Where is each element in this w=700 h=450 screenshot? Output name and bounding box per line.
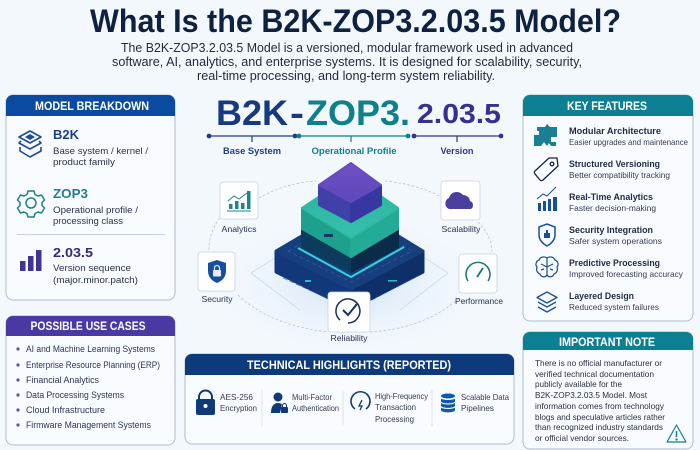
note text: B2K-ZOP3.2.03.5 Model. Most bbox=[535, 390, 648, 400]
icon: speed gauge bbox=[351, 392, 370, 410]
note text bbox=[535, 358, 665, 443]
highlight: authentication: Multi-Factor bbox=[292, 392, 332, 402]
feature: modular architecture: Modular Architecture bbox=[569, 126, 661, 137]
upper layer: teal bbox=[302, 175, 398, 257]
highlight: data pipelines: Pipelines bbox=[461, 403, 494, 413]
icon: stacked layers bbox=[19, 131, 41, 157]
feature: predictive processing bbox=[536, 257, 684, 279]
card: performance: Performance bbox=[455, 296, 503, 306]
intro text: software, AI, analytics, and enterprise systems. It is designed for scalability, security, bbox=[112, 54, 582, 69]
highlight: data pipelines bbox=[441, 392, 509, 413]
use case list: Firmware Management Systems bbox=[26, 420, 151, 430]
icon: warning triangle bbox=[667, 425, 686, 442]
feature: predictive processing: Improved forecasting accuracy bbox=[569, 269, 684, 279]
highlight: encryption bbox=[196, 391, 257, 415]
card: performance bbox=[455, 254, 503, 306]
B2K entry: Base system / kernel / bbox=[53, 146, 148, 157]
header: key features bbox=[523, 95, 693, 116]
note text: publicly available for the bbox=[535, 379, 622, 389]
version entry bbox=[53, 245, 138, 286]
ZOP3 entry bbox=[53, 186, 138, 227]
version entry: Version sequence bbox=[53, 263, 131, 274]
icon: shield lock bbox=[208, 260, 226, 283]
card: reliability: Reliability bbox=[330, 333, 368, 343]
feature: predictive processing: Predictive Processing bbox=[569, 258, 660, 269]
intro text: real-time processing, and long-term system reliability. bbox=[197, 68, 495, 83]
highlight: transaction processing: Processing bbox=[375, 414, 414, 424]
card: security: Security bbox=[202, 294, 233, 304]
feature: layered design bbox=[537, 291, 659, 312]
icon: database bbox=[441, 394, 455, 412]
feature: structured versioning: Better compatibility tracking bbox=[569, 170, 670, 180]
model name wordmark: - bbox=[290, 94, 304, 133]
ZOP3 entry: ZOP3 bbox=[53, 186, 88, 201]
icon: check circle bbox=[336, 299, 360, 323]
feature: security integration: Safer system operations bbox=[569, 236, 662, 246]
highlight: transaction processing: Transaction bbox=[375, 402, 416, 412]
top cube: purple bbox=[319, 163, 381, 222]
icon: brain bbox=[536, 257, 558, 277]
header: possible use cases bbox=[6, 316, 175, 336]
B2K entry bbox=[53, 127, 148, 168]
feature: layered design: Reduced system failures bbox=[569, 302, 659, 312]
icon: analytics chart bbox=[227, 191, 251, 211]
highlight: data pipelines: Scalable Data bbox=[461, 392, 509, 402]
header: model breakdown bbox=[6, 95, 175, 116]
card: scalability bbox=[441, 181, 481, 234]
icon: rising bars bbox=[537, 187, 557, 211]
feature: real-time analytics bbox=[537, 187, 656, 213]
note text: than recognized industry standards bbox=[535, 422, 663, 432]
intro text bbox=[112, 40, 582, 83]
feature: layered design: Layered Design bbox=[569, 291, 634, 302]
card: security bbox=[198, 252, 235, 304]
note text: information comes from technology bbox=[535, 401, 665, 411]
B2K entry: B2K bbox=[53, 127, 80, 142]
feature: modular architecture bbox=[534, 124, 688, 147]
model name wordmark: 2.03.5 bbox=[417, 98, 501, 129]
header: possible use cases: POSSIBLE USE CASES bbox=[30, 321, 146, 333]
dashed orbit around stack bbox=[209, 181, 492, 332]
icon: shield bbox=[539, 224, 555, 246]
card: analytics bbox=[220, 182, 258, 234]
segment bracket: base system: Base System bbox=[223, 146, 281, 157]
feature: real-time analytics: Real-Time Analytics bbox=[569, 192, 653, 203]
version entry: 2.03.5 bbox=[53, 245, 93, 260]
middle layer: dark bbox=[301, 228, 399, 273]
model name wordmark: ZOP3. bbox=[306, 94, 410, 133]
segment bracket: operational profile: Operational Profile bbox=[312, 146, 396, 157]
icon: gauge bbox=[466, 262, 490, 281]
note text: verified technical documentation bbox=[535, 369, 654, 379]
header: technical highlights bbox=[185, 354, 514, 375]
panel: key features bbox=[523, 95, 693, 321]
icon: version bars bbox=[20, 250, 42, 271]
ZOP3 entry: Operational profile / bbox=[53, 205, 138, 216]
use case list: Financial Analytics bbox=[26, 375, 99, 385]
feature: structured versioning bbox=[534, 158, 670, 181]
intro text: The B2K-ZOP3.2.03.5 Model is a versioned, modular framework used in advanced bbox=[121, 40, 573, 55]
use case list bbox=[16, 344, 160, 430]
card: scalability: Scalability bbox=[442, 224, 481, 234]
header: key features: KEY FEATURES bbox=[567, 101, 647, 113]
B2K entry: product family bbox=[53, 157, 115, 168]
icon: cloud bbox=[445, 192, 473, 209]
floor outline bbox=[251, 258, 448, 310]
feature: structured versioning: Structured Versioning bbox=[569, 159, 660, 170]
icon: padlock bbox=[196, 391, 215, 415]
note text: blogs and speculative articles rather bbox=[535, 412, 665, 422]
ZOP3 entry: processing class bbox=[53, 216, 123, 227]
segment bracket: version bbox=[412, 134, 503, 157]
feature: security integration bbox=[539, 224, 662, 246]
card: reliability bbox=[328, 292, 370, 343]
use case list: Data Processing Systems bbox=[26, 390, 124, 400]
card: analytics: Analytics bbox=[222, 224, 256, 234]
header: technical highlights: TECHNICAL HIGHLIGHTS (REPORTED) bbox=[247, 360, 451, 372]
header: important note: IMPORTANT NOTE bbox=[559, 337, 655, 349]
icon: tag bbox=[534, 158, 558, 181]
highlight: transaction processing bbox=[351, 391, 429, 424]
highlight: encryption: Encryption bbox=[220, 403, 257, 413]
note text: There is no official manufacturer or bbox=[535, 358, 662, 368]
panel: important note bbox=[523, 332, 693, 449]
use case list: AI and Machine Learning Systems bbox=[26, 344, 155, 354]
icon: layers bbox=[537, 292, 557, 312]
feature: modular architecture: Easier upgrades and maintenance bbox=[569, 137, 688, 147]
icon: gear bbox=[18, 191, 44, 217]
highlight: authentication: Authentication bbox=[292, 403, 339, 413]
header: important note bbox=[523, 332, 693, 350]
use case list: Cloud Infrastructure bbox=[26, 405, 105, 415]
segment bracket: operational profile bbox=[297, 134, 410, 157]
header: model breakdown: MODEL BREAKDOWN bbox=[35, 101, 149, 113]
panel: model breakdown bbox=[6, 95, 175, 300]
segment bracket: version: Version bbox=[440, 146, 474, 157]
note text: or official vendor sources. bbox=[535, 433, 629, 443]
icon: user with lock bbox=[271, 392, 288, 413]
panel: possible use cases bbox=[6, 316, 175, 445]
icon: puzzle bbox=[534, 124, 557, 146]
feature: real-time analytics: Faster decision-making bbox=[569, 203, 656, 213]
version entry: (major.minor.patch) bbox=[53, 275, 138, 286]
model name wordmark: B2K bbox=[216, 94, 288, 133]
base layer: navy bbox=[276, 207, 423, 309]
title: What Is the B2K-ZOP3.2.03.5 Model? bbox=[90, 3, 621, 39]
highlight: transaction processing: High-Frequency bbox=[375, 391, 429, 401]
central layered stack bbox=[251, 163, 448, 310]
use case list: Enterprise Resource Planning (ERP) bbox=[26, 360, 160, 370]
highlight: authentication bbox=[271, 392, 339, 413]
feature: security integration: Security Integration bbox=[569, 225, 653, 236]
panel: technical highlights bbox=[185, 354, 514, 444]
highlight: encryption: AES-256 bbox=[220, 392, 253, 402]
segment bracket: base system bbox=[207, 134, 297, 157]
model name wordmark bbox=[216, 94, 501, 133]
